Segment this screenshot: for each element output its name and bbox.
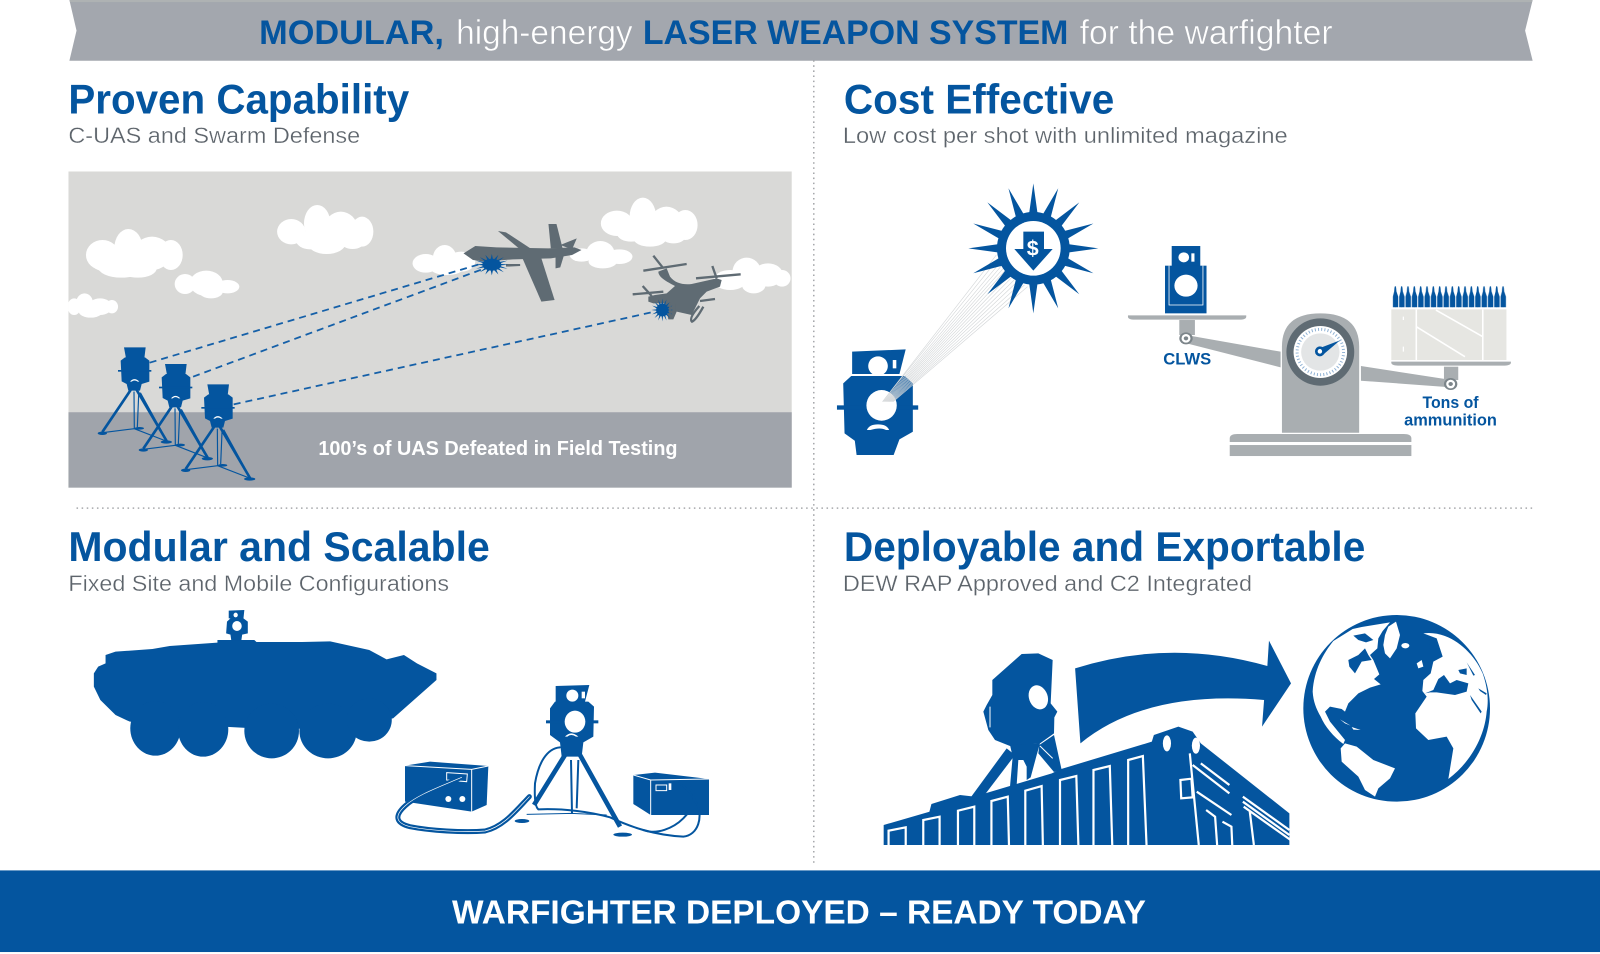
header title	[259, 14, 1333, 52]
balance scale	[1128, 246, 1511, 456]
icon: tilted laser turret on tripod	[970, 653, 1062, 798]
subheading: fixed site: Fixed Site and Mobile Configurations	[68, 571, 449, 596]
heading: modular and scalable: Modular and Scalable	[68, 524, 490, 570]
header title: MODULAR,	[259, 14, 444, 52]
icon: sun burst with dollar arrow: $	[1027, 237, 1039, 261]
dial gauge	[1286, 318, 1354, 386]
icon: left power box	[405, 762, 488, 812]
heading: proven capability: Proven Capability	[68, 76, 409, 122]
panel: proven capability	[68, 76, 792, 488]
quadcopter drone	[633, 256, 741, 322]
icon: armored vehicle with turret	[94, 610, 436, 758]
footer text: WARFIGHTER DEPLOYED – READY TODAY	[452, 894, 1146, 931]
label: tons of ammunition: ammunition	[1404, 412, 1497, 430]
fixed-wing drone	[464, 224, 581, 302]
icon: globe	[1303, 615, 1490, 802]
label: CLWS: CLWS	[1163, 350, 1211, 368]
subheading: low cost: Low cost per shot with unlimited magazine	[843, 123, 1288, 148]
header title: high-energy	[456, 14, 633, 52]
header title: for the warfighter	[1080, 14, 1333, 52]
cables	[398, 747, 700, 837]
icon: sun burst with dollar arrow	[968, 183, 1098, 313]
illustration: field test scene	[68, 171, 792, 488]
footer banner	[0, 870, 1600, 952]
header title: LASER WEAPON SYSTEM	[643, 14, 1068, 52]
arrow	[1075, 641, 1291, 743]
panel: modular and scalable	[68, 524, 709, 837]
icon: shipping container	[884, 727, 1291, 845]
subheading: C-UAS: C-UAS and Swarm Defense	[68, 123, 360, 148]
laser beams	[150, 263, 655, 404]
icon: tripod laser	[515, 685, 632, 837]
beam lines	[882, 255, 1028, 402]
panel: deployable and exportable	[843, 524, 1490, 845]
icon: ammunition crate with rounds	[1391, 286, 1506, 360]
illustration: scale and laser	[837, 246, 1511, 456]
vertical dotted divider	[813, 60, 815, 865]
laser turrets	[98, 347, 255, 481]
horizontal dotted divider	[77, 507, 1533, 509]
icon: right power box	[633, 773, 709, 815]
icon: laser turret firing	[837, 349, 918, 455]
heading: deployable and exportable: Deployable and Exportable	[844, 524, 1365, 570]
label: tons of ammunition	[1404, 394, 1497, 430]
subheading: DEW RAP: DEW RAP Approved and C2 Integrated	[843, 571, 1252, 596]
header banner	[69, 0, 1533, 61]
caption: field testing: 100’s of UAS Defeated in Field Testing	[318, 438, 678, 460]
clouds	[68, 198, 791, 318]
label: tons of ammunition: Tons of	[1422, 394, 1479, 412]
panel: cost effective	[837, 76, 1511, 456]
heading: cost effective: Cost Effective	[844, 76, 1114, 122]
illustration: container to globe	[884, 615, 1490, 845]
icon: CLWS turret on tray	[1165, 246, 1207, 313]
illustration: tripod laser with power boxes	[398, 685, 709, 837]
